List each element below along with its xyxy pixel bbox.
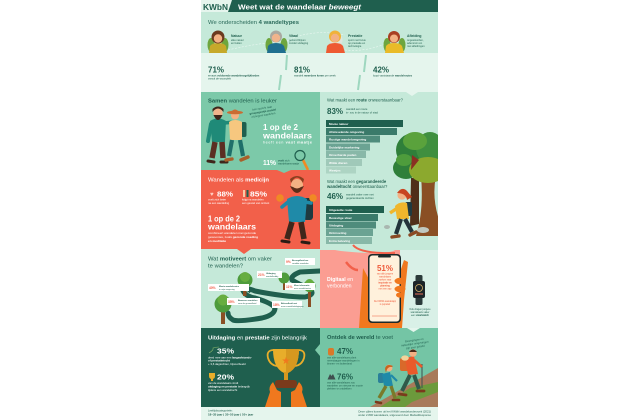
illustration: hand xyxy=(359,260,408,328)
callout 35%: 35% xyxy=(228,300,235,304)
stat 88%: 88% xyxy=(217,190,233,198)
stat 51%: inspiratie en xyxy=(378,282,392,284)
stat 81%: wandelt meerdere keren per week xyxy=(294,74,336,78)
callout 9%: Bezorgdheid om xyxy=(292,259,308,262)
callout 40%: Mooie wandelroutes xyxy=(219,285,240,288)
icon: smartwatch xyxy=(413,275,425,305)
callout 35%: voor de gezondheid xyxy=(238,302,257,305)
stat 85%: krijgt na wandelen xyxy=(242,198,264,202)
bar chart: wandeltocht: Extra beleving xyxy=(329,239,350,243)
callout 9%: 9% xyxy=(286,260,291,264)
logo: KWbN xyxy=(203,3,228,12)
stat 71%: vanuit de woonplek xyxy=(208,76,232,80)
text: horloge: Ook dragen jongere xyxy=(409,308,431,311)
speech text: zijn zeer geliefd xyxy=(406,344,425,350)
label: Prestatie: sport met focus xyxy=(348,38,366,42)
text: horloge xyxy=(409,308,431,317)
heading: te wandelen? xyxy=(208,264,244,270)
footer xyxy=(201,407,438,420)
bar chart: route xyxy=(326,120,403,174)
tree 3 xyxy=(278,272,290,290)
leeftijden: Leeftijdscategorieën: xyxy=(208,408,233,412)
stat 35% xyxy=(208,346,252,366)
stat 42% xyxy=(373,66,413,78)
panel: digitaal xyxy=(320,245,438,328)
stat 83% xyxy=(327,107,378,116)
panel: medicijn xyxy=(201,170,320,249)
stat 1 op de 2: en meditatie xyxy=(208,239,226,243)
stat 85%: een gevoel van ontrust xyxy=(242,201,269,205)
stat 1 op de 2: 1 op de 2 xyxy=(263,123,299,132)
person: Vitaal xyxy=(266,30,288,53)
stat 1 op de 2: wandelaars xyxy=(262,132,313,140)
illustration: trofee: ★ xyxy=(282,356,291,367)
person: Natuur xyxy=(208,30,228,53)
label: Natuur: elke natuur xyxy=(231,38,244,42)
stat 11%: 11% xyxy=(263,160,277,167)
bar chart: wandeltocht xyxy=(326,206,384,244)
stat 1 op de 2: combineert wandelen met gezonde xyxy=(208,231,256,235)
stat 76%: van alle wandelaars zou xyxy=(327,380,355,384)
illustration: wandelpad xyxy=(228,271,320,321)
panel: samen wandelen xyxy=(201,92,320,170)
stat 83%: in- zou in de natuur of stad xyxy=(346,110,378,114)
heading: Ontdek de wereld te voet xyxy=(327,335,394,341)
heading xyxy=(326,179,388,189)
label: Vitaal: Vitaal xyxy=(289,34,298,38)
bar chart: route: Weetjes xyxy=(329,168,341,172)
stat 47%: van alle wandelaars plant xyxy=(327,356,357,360)
callout 11%: over wandelroutes xyxy=(294,287,311,290)
stat 11%: wandelaarsmaatje xyxy=(278,162,300,166)
illustration: vingers xyxy=(394,278,406,298)
callout 11% xyxy=(285,283,315,290)
bar chart: wandeltocht: Bevestige sfeer xyxy=(329,216,353,220)
bar chart: route: Rustige wandelomgeving xyxy=(329,137,366,141)
stat 51%: met een app xyxy=(379,288,392,290)
bar chart: route: Afwisselende omgeving xyxy=(329,130,364,134)
callout 40% xyxy=(208,284,249,291)
speech text xyxy=(400,336,430,351)
panel: statistieken xyxy=(201,53,438,92)
stat 20%: 20% xyxy=(217,372,234,382)
illustration: boom xyxy=(393,132,438,236)
stat 1 op de 2 xyxy=(207,214,258,243)
stat 88%: ♥ xyxy=(210,192,214,198)
label: Vitaal xyxy=(289,34,309,45)
callout 21%: 21% xyxy=(258,273,265,277)
stat 83%: 83% xyxy=(327,107,343,116)
callout 18%: 18% xyxy=(273,303,280,307)
stat 47%: binnen- en buitenland xyxy=(327,362,353,366)
stat 51% xyxy=(374,264,397,306)
label: Natuur: Natuur xyxy=(231,34,243,38)
stat 11% xyxy=(263,158,300,167)
bron: Deze cijfers komen uit het KWbN wandelonderzoek (2021) xyxy=(358,410,431,414)
callout 11%: Meer informatie xyxy=(294,284,310,287)
label: Natuur: en buiten xyxy=(231,41,242,45)
header xyxy=(201,0,438,12)
heading: Wat motiveert om vaker xyxy=(208,256,272,262)
heading: verbonden xyxy=(327,284,352,290)
callout 18% xyxy=(272,301,304,308)
illustration: wandelaar man xyxy=(399,349,424,395)
speech text: of jongere wandelen xyxy=(251,111,276,119)
bar chart: wandeltocht: Uitgezette route xyxy=(329,208,353,212)
leeftijden: 18–35 jaar | 35–55 jaar | 55+ jaar xyxy=(208,412,254,416)
stat 20% xyxy=(208,372,250,392)
leeftijden xyxy=(208,408,254,416)
label: Vitaal: zonder uitdaging xyxy=(289,41,309,45)
stat 1 op de 2: gewoontes, zoals gezonde voeding xyxy=(208,235,258,239)
speech text: groepsgewijs wandel xyxy=(249,107,277,116)
stat 11%: voelt zich xyxy=(278,158,290,162)
illustration: telefoon xyxy=(368,254,401,323)
stat 35%: 35% xyxy=(217,346,234,356)
label: Afleiding: ademruim én xyxy=(407,41,423,45)
heading: Samen wandelen is leuker xyxy=(208,98,277,104)
stat 35%: of prestatietocht xyxy=(208,358,230,362)
stat 46% xyxy=(327,192,374,201)
text: horloge: een smartwatch xyxy=(411,314,430,317)
stat 47%: meerdaagse wandelingen in xyxy=(327,358,360,362)
panel: uitdaging xyxy=(201,328,320,407)
tree 4 xyxy=(304,279,316,307)
bron xyxy=(358,410,431,417)
stat 81% xyxy=(294,66,336,78)
panel: motivatie xyxy=(201,249,320,328)
illustration: vrouw xyxy=(226,110,248,160)
callout 9%: conditie wandelen xyxy=(292,262,309,265)
stat 51%: 51% xyxy=(377,264,393,273)
stat 42%: loopt vaststaande wandelroutes xyxy=(373,74,413,78)
heading xyxy=(327,277,353,290)
speech text: natuurlijke omgevingen xyxy=(401,340,429,347)
stat 35%: deed mee aan een langeafstands- xyxy=(208,356,252,360)
stat 20%: van de wandelaars vindt xyxy=(208,381,238,385)
stat 88%: voelt zich beter xyxy=(208,198,226,202)
speech text: ben opzoek naar xyxy=(252,105,273,112)
illustration: man xyxy=(206,106,235,162)
icon: vergrootglas xyxy=(295,150,308,170)
panel: route onweerstaanbaar xyxy=(320,92,447,250)
stat 76% xyxy=(327,372,363,390)
callout 35% xyxy=(227,298,260,305)
callout 18%: meer wandeluitdagingen xyxy=(281,305,304,308)
tree 2 xyxy=(214,294,232,324)
stat 71%: 71% xyxy=(208,66,224,74)
callout 11%: 11% xyxy=(286,285,292,289)
stat 76%: 76% xyxy=(337,372,353,382)
bron: onder 2.800 wandelaars, uitgevoerd door MarketResponse xyxy=(358,413,431,417)
heading: We onderscheiden 4 wandeltypes xyxy=(208,20,299,26)
text: horloge: wandelaars vaker xyxy=(411,311,430,314)
illustration: berg xyxy=(370,368,438,407)
stat 88% xyxy=(208,190,233,205)
stat 85%: 85% xyxy=(250,190,267,198)
tree 1 xyxy=(238,272,252,296)
stat 51%: planning xyxy=(380,286,390,288)
callout 40%: 40% xyxy=(209,286,216,290)
person: Afleiding xyxy=(384,31,406,53)
heading: Wat maakt een route onweerstaanbaar? xyxy=(327,98,404,102)
bar chart: wandeltocht: Uitdaging xyxy=(329,223,343,227)
label: Natuur xyxy=(231,34,244,45)
title: Weet wat de wandelaar beweegt xyxy=(238,2,361,11)
stat 85% xyxy=(242,190,269,205)
bar chart: route: Onverharde paden xyxy=(329,153,356,157)
illustration: wandelaar vrouw xyxy=(376,365,399,403)
stat 51%: De KWbN-wandelapp xyxy=(374,301,397,303)
label: Afleiding: met afleidingen xyxy=(407,44,425,48)
heading: wandeltocht onweerstaanbaar? xyxy=(326,184,388,189)
stat 1 op de 2 xyxy=(262,123,313,144)
heading: Wat maakt een gegarandeerde xyxy=(327,179,387,184)
stat 42%: 42% xyxy=(373,66,389,74)
label: Prestatie xyxy=(348,34,366,48)
stat 71% xyxy=(208,66,260,80)
stat 35%: + 3,6 dagtochten, bijvoorbeeld xyxy=(208,362,246,366)
stat 83%: wandelt een route xyxy=(346,107,368,111)
stat 1 op de 2: wandelaars xyxy=(207,222,257,232)
callout 9% xyxy=(285,258,315,265)
stat 46%: wandelt vaker mee met xyxy=(346,192,374,196)
stat 20%: uitdaging en prestatie belangrijk xyxy=(208,384,250,388)
heading: Wandelen als medicijn xyxy=(208,178,269,184)
label: Afleiding xyxy=(407,34,425,48)
bar chart: wandeltocht: Ontmoeting xyxy=(329,231,346,235)
heading: Uitdaging en prestatie zijn belangrijk xyxy=(208,336,307,342)
stat 51%: wandelaars xyxy=(379,276,392,278)
stat 47% xyxy=(327,347,360,366)
heading xyxy=(208,256,272,270)
label: Prestatie: op prestatie en xyxy=(348,41,366,45)
callout 18%: Bekendheid met xyxy=(281,302,297,305)
illustration: man met baard xyxy=(276,176,317,243)
stat 71%: ervaart voldoende wandelmogelijkheden xyxy=(208,74,260,78)
bar chart: route: Wilde dieren xyxy=(329,161,347,165)
panel: wandeltypes xyxy=(201,12,438,53)
stat 47%: 47% xyxy=(337,347,353,356)
label: Prestatie: technologie xyxy=(348,44,362,48)
stat 46%: gegarandeerde tochten xyxy=(346,196,374,200)
speech text xyxy=(249,104,277,119)
stat 1 op de 2: 1 op de 2 xyxy=(208,214,240,224)
person: Prestatie xyxy=(326,30,345,53)
speech text: Bewegingen en xyxy=(405,337,424,343)
stat 81%: 81% xyxy=(294,66,310,74)
callout 21%: wandelbuddy xyxy=(266,276,279,278)
label: Vitaal: gezond blijven xyxy=(289,38,306,42)
callout 21%: Uitdaging xyxy=(266,272,276,275)
stat 51%: is populair xyxy=(380,303,390,306)
label: Afleiding: Afleiding xyxy=(407,34,422,38)
callout 40%: in mijn omgeving xyxy=(219,289,235,291)
heading: Digitaal en xyxy=(327,277,353,283)
stat 88%: na een wandeling xyxy=(208,201,230,205)
stat 51%: van alle jongere xyxy=(377,272,394,276)
callout 35%: Bewezen voordelen xyxy=(238,299,258,302)
panel: ontdek de wereld xyxy=(320,328,438,407)
stat 76%: wandelen om nieuwe en mooie xyxy=(327,384,363,388)
illustration: wandelaar xyxy=(384,189,429,237)
stat 51%: zoeken naar xyxy=(379,278,392,282)
callout 21% xyxy=(257,271,282,278)
bar chart: route: Duidelijke markering xyxy=(329,145,360,149)
bar chart: route: Mooie natuur xyxy=(329,122,349,126)
label: Prestatie: Prestatie xyxy=(348,34,362,38)
stat 20%: tijdens een wandeltocht xyxy=(208,388,237,392)
stat 76%: plekken te ontdekken xyxy=(327,386,352,390)
stat 1 op de 2: heeft een vast maatje xyxy=(263,140,312,144)
label: Afleiding: ongestoorden, xyxy=(407,38,424,42)
stat 46%: 46% xyxy=(327,192,343,201)
